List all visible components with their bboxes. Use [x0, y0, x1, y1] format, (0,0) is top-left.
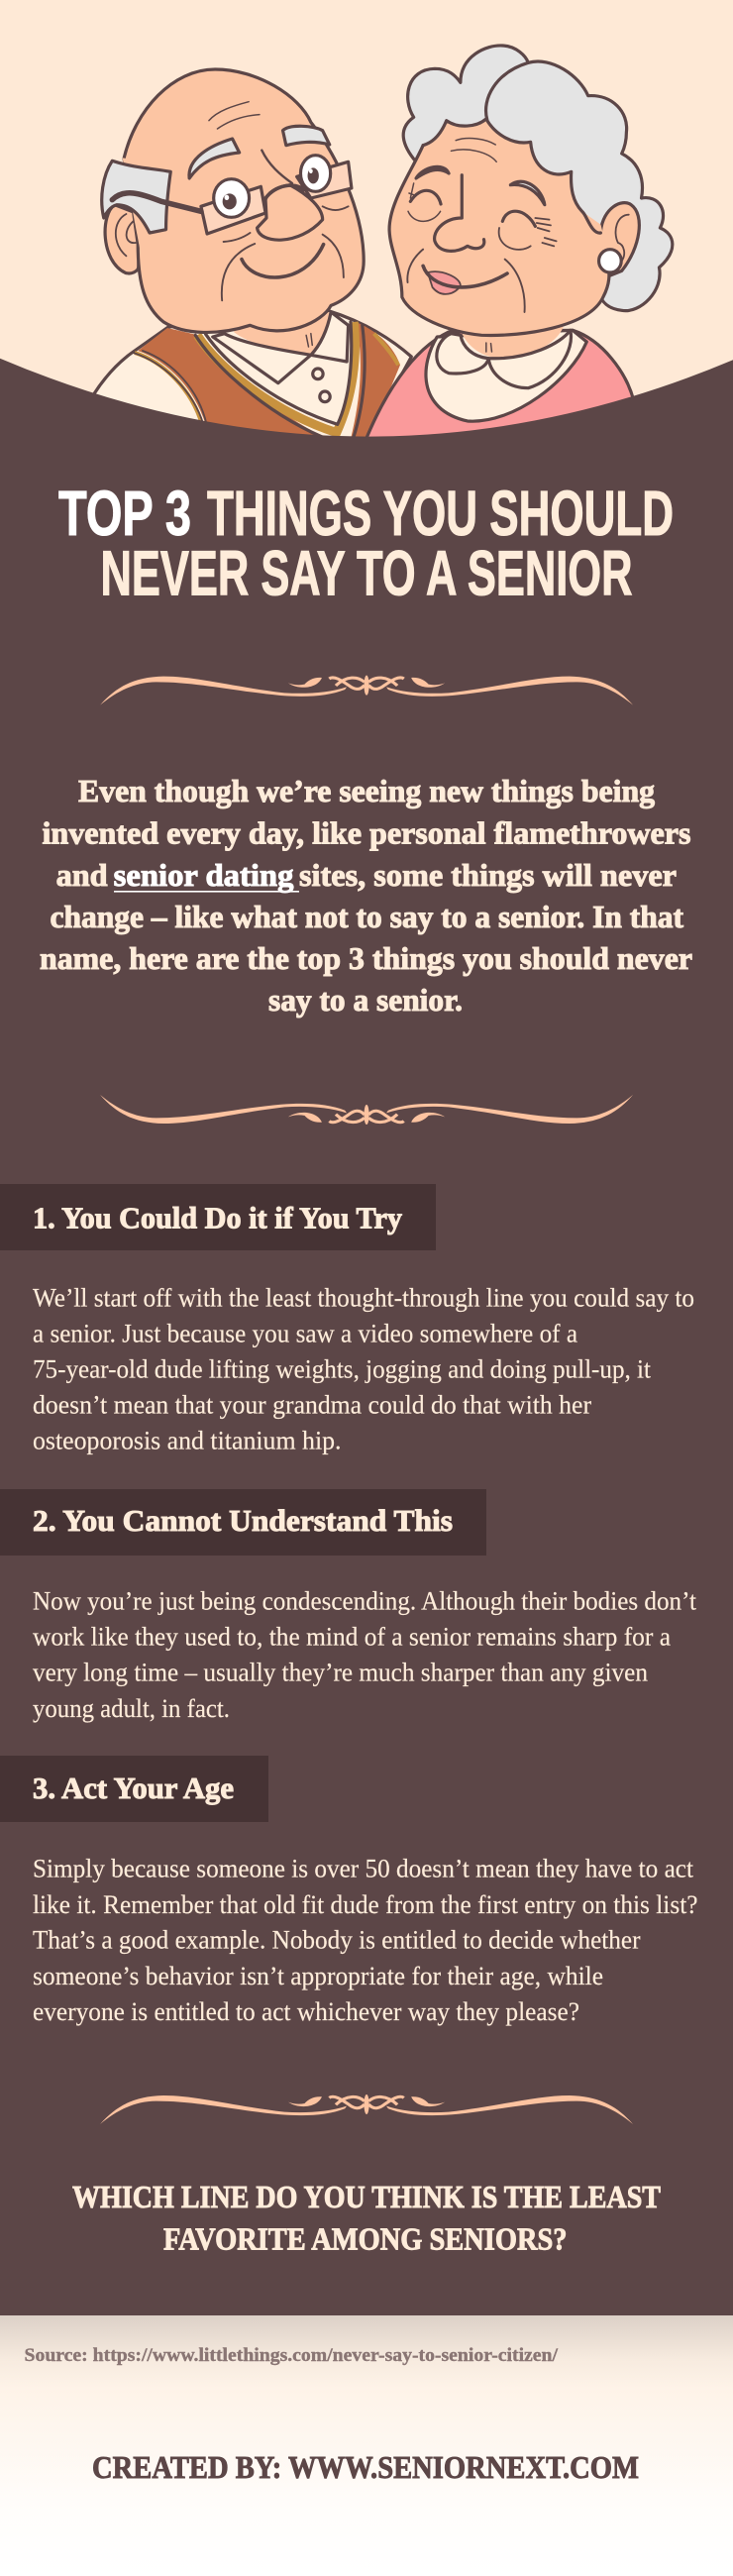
- woman: hair: [403, 46, 673, 311]
- closing question: FAVORITE AMONG SENIORS?: [163, 2221, 567, 2257]
- title: TOP 3: [58, 478, 191, 549]
- closing question: [72, 2179, 661, 2257]
- woman: eyes, nose and mouth: [408, 166, 557, 294]
- section 3 body: [33, 1855, 697, 2026]
- section 2: [0, 1489, 697, 1723]
- section 3 body: Simply because someone is over 50 doesn’t mean they have to act: [33, 1855, 694, 1882]
- section 2 body: Now you’re just being condescending. Although their bodies don’t: [33, 1586, 697, 1615]
- section 1 body: 75-year-old dude lifting weights, jogging and doing pull-up, it: [33, 1355, 652, 1383]
- ornament divider 2: [100, 1095, 633, 1125]
- intro paragraph: change – like what not to say to a senior. In that: [50, 899, 683, 934]
- footer background: [0, 2315, 733, 2576]
- man: ear: [105, 205, 141, 273]
- section 3 body: That’s a good example. Nobody is entitled to decide whether: [33, 1926, 641, 1955]
- intro paragraph: say to a senior.: [268, 982, 463, 1018]
- section 2 heading: [0, 1489, 486, 1556]
- section 1 body: [33, 1284, 694, 1455]
- woman: dress: [365, 330, 633, 443]
- section 2 body: [33, 1586, 697, 1723]
- woman: ear: [600, 203, 639, 277]
- section 3 body: someone’s behavior isn’t appropriate for their age, while: [33, 1962, 603, 1990]
- man: head: [123, 69, 364, 332]
- man: neck and collar: [213, 312, 349, 402]
- section 1 body: a senior. Just because you saw a video somewhere of a: [33, 1320, 577, 1347]
- section 2 heading: 2. You Cannot Understand This: [33, 1503, 453, 1538]
- intro paragraph: senior dating: [114, 857, 293, 893]
- intro paragraph: invented every day, like personal flamethrowers: [42, 814, 691, 850]
- section 3 heading: 3. Act Your Age: [33, 1771, 234, 1805]
- section 1 body: osteoporosis and titanium hip.: [33, 1427, 341, 1455]
- section 1: [0, 1184, 694, 1455]
- section 1 heading: [0, 1184, 436, 1250]
- dark panel with curved top: [0, 359, 733, 2315]
- closing question: WHICH LINE DO YOU THINK IS THE LEAST: [72, 2179, 661, 2214]
- section 1 body: We’ll start off with the least thought-through line you could say to: [33, 1284, 694, 1312]
- section 1 heading: 1. You Could Do it if You Try: [33, 1201, 402, 1234]
- section 1 body: doesn’t mean that your grandma could do that with her: [33, 1391, 591, 1419]
- created by credit: CREATED BY: WWW.SENIORNEXT.COM: [92, 2449, 639, 2485]
- ornament divider 3: [100, 2094, 633, 2124]
- woman: neck and collar: [437, 327, 571, 388]
- header background: [0, 0, 733, 515]
- section 2 body: young adult, in fact.: [33, 1694, 230, 1723]
- intro paragraph: and: [56, 857, 108, 893]
- ornament divider 1: [100, 676, 633, 705]
- man: glasses, eyes and nose: [112, 151, 352, 240]
- woman: face: [389, 62, 609, 336]
- section 3: [0, 1756, 697, 2026]
- section 3 heading: [0, 1756, 268, 1822]
- title: [58, 478, 674, 608]
- illustration: senior couple: [93, 46, 673, 443]
- section 3 body: everyone is entitled to act whichever way they please?: [33, 1997, 579, 2026]
- section 2 body: very long time – usually they’re much sharper than any given: [33, 1659, 648, 1687]
- intro paragraph: Even though we’re seeing new things being: [78, 773, 655, 808]
- section 2 body: work like they used to, the mind of a senior remains sharp for a: [33, 1622, 671, 1651]
- intro paragraph: name, here are the top 3 things you should never: [40, 940, 692, 976]
- section 3 body: like it. Remember that old fit dude from the first entry on this list?: [33, 1890, 697, 1919]
- intro paragraph: sites, some things will never: [299, 857, 677, 893]
- woman: earring: [599, 250, 621, 272]
- intro paragraph: [40, 773, 692, 1018]
- man: hair and eyebrows: [102, 126, 330, 233]
- man: torso and shirt: [93, 310, 411, 443]
- source line: Source: https://www.littlethings.com/never-say-to-senior-citizen/: [24, 2345, 559, 2366]
